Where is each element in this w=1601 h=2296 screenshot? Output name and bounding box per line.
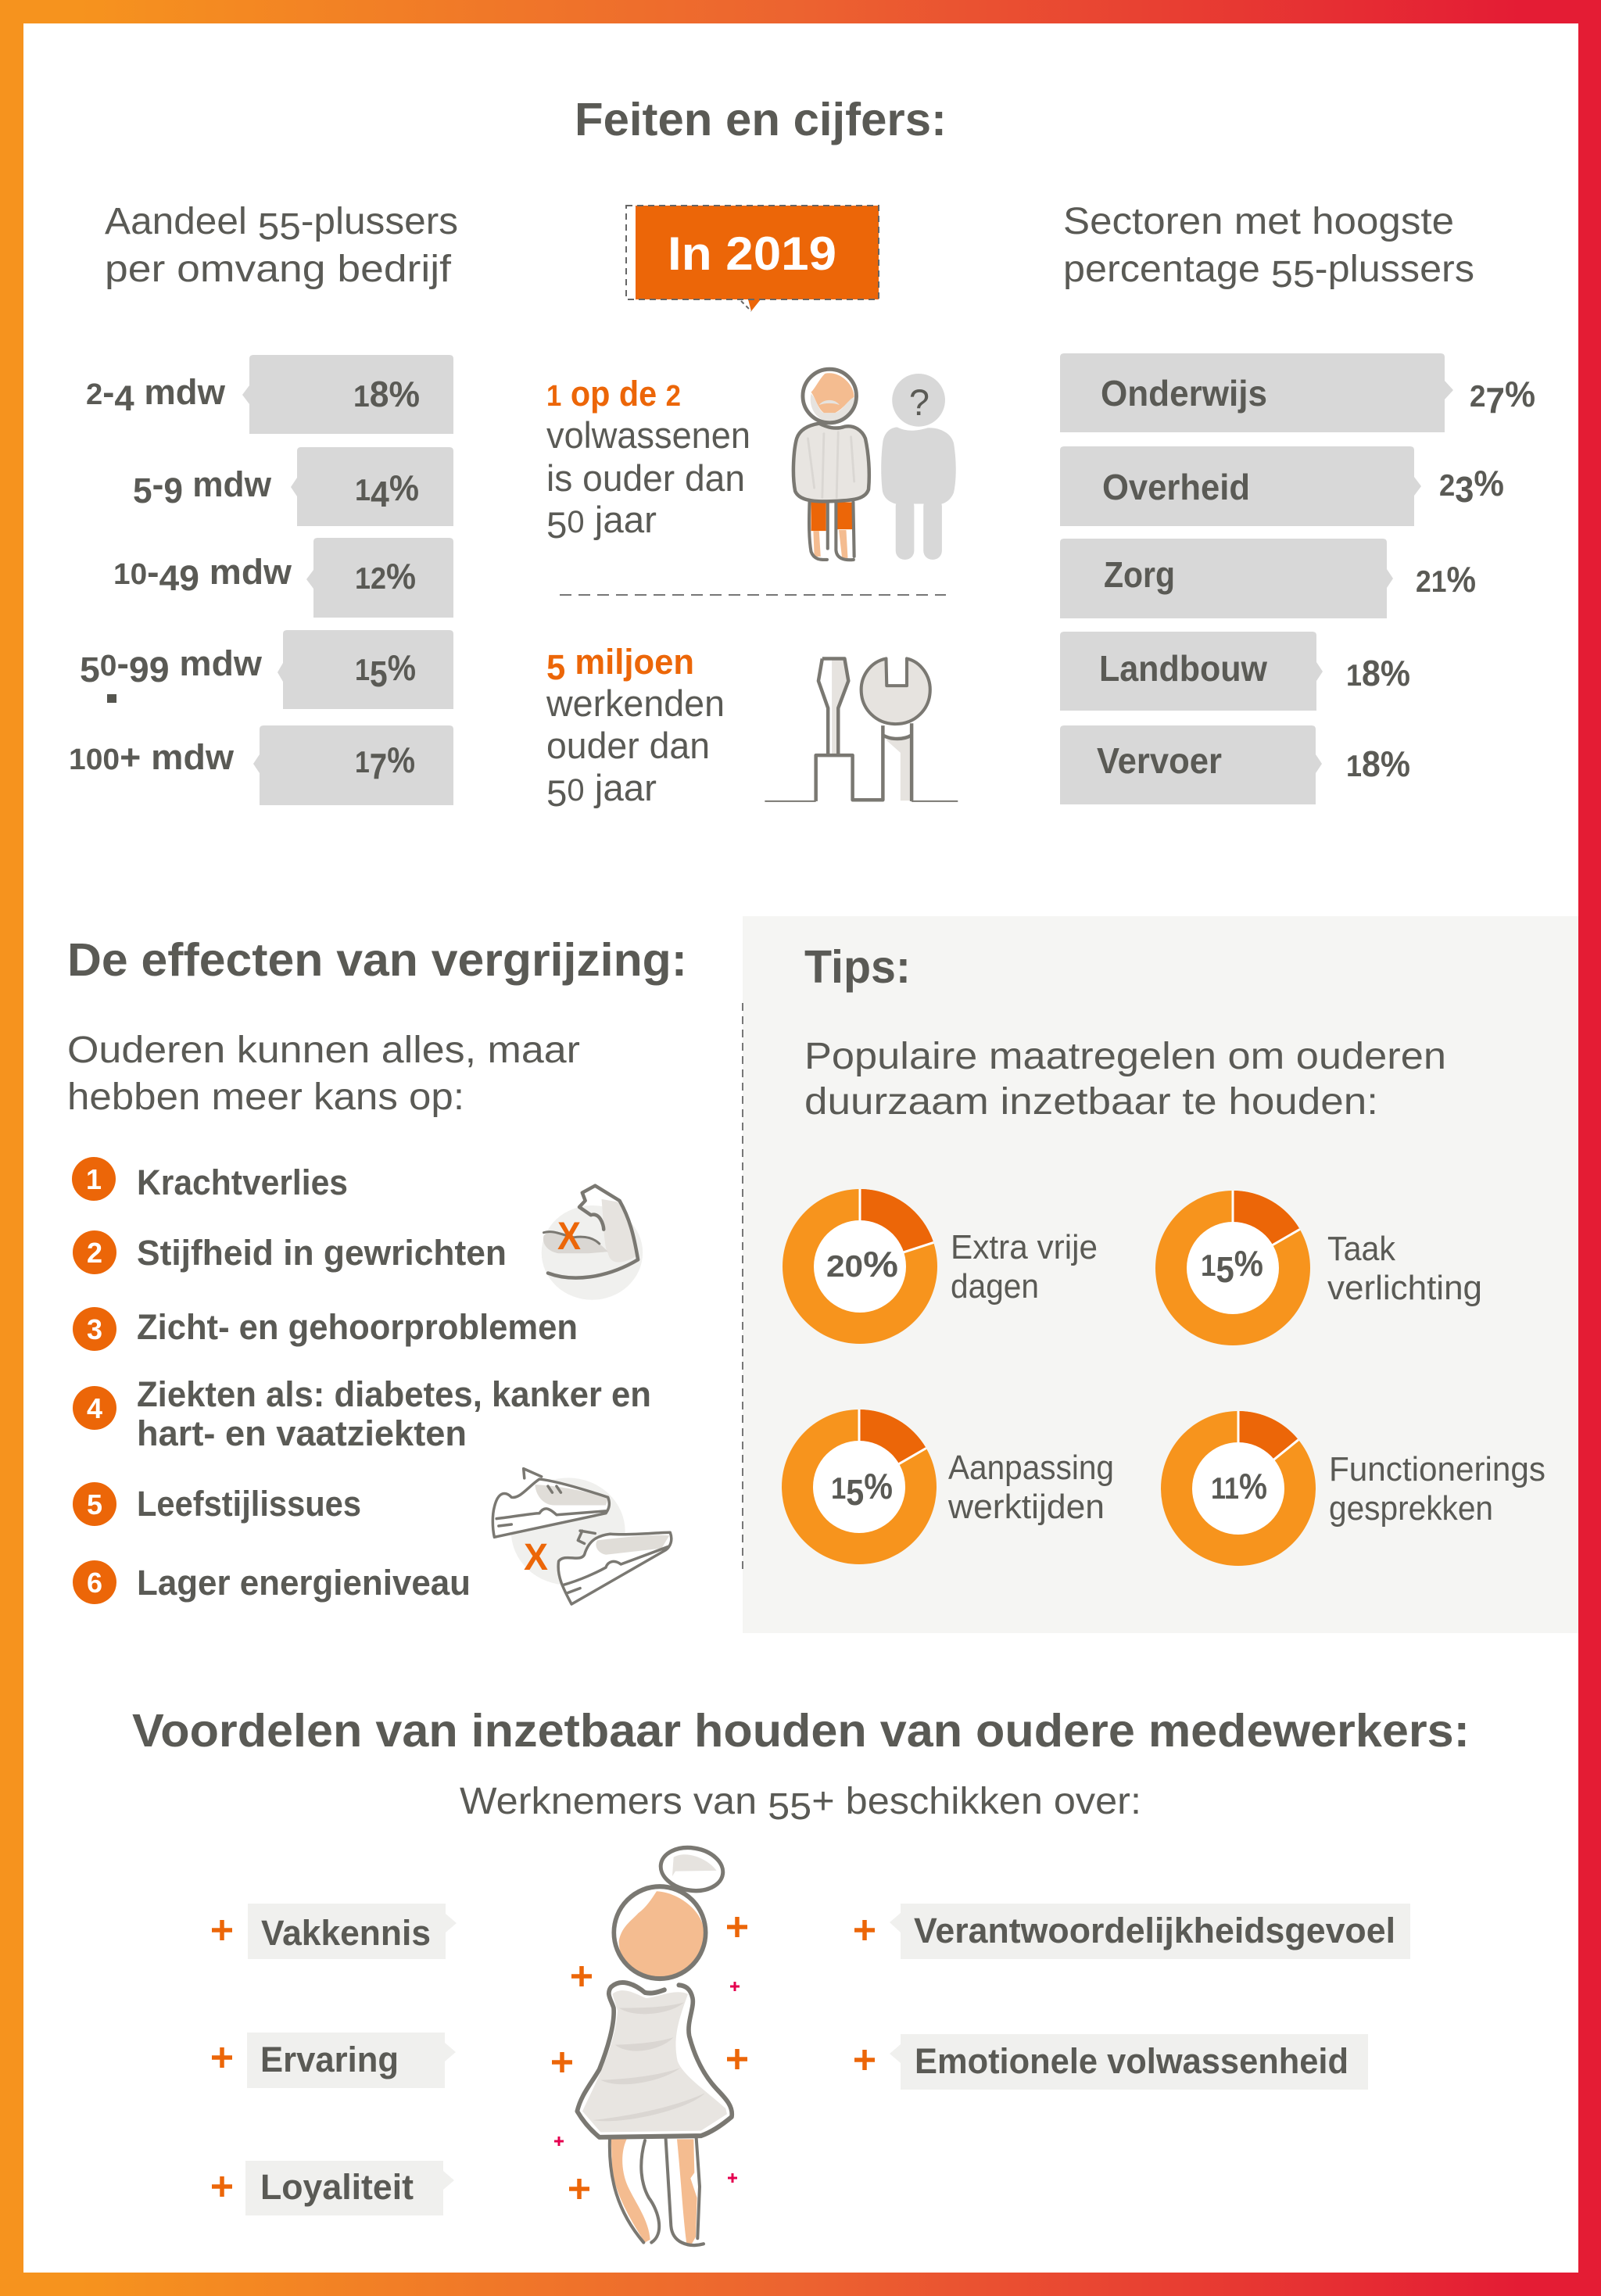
bar: 50-99 mdw 15%: 1	[355, 654, 370, 687]
text block: 1 op de 2: 1 op de 2	[546, 374, 681, 414]
icon: screwdriver and wrench	[765, 658, 958, 801]
callout: In 2019: In 2019	[668, 227, 836, 280]
list item 6: Lager energieniveau	[137, 1563, 471, 1603]
text block: 5 miljoen: 5	[546, 772, 567, 814]
donut: 15% Taak verlichting: 1	[1201, 1249, 1216, 1283]
bar: Zorg 21%	[1060, 539, 1476, 618]
icon: sneakers with X	[492, 1469, 672, 1604]
subheading: Sectoren met hoogste	[1063, 201, 1474, 296]
text block: 1 op de 2: 0	[567, 505, 585, 539]
panel: effects of ageing	[67, 934, 687, 1604]
bar: 50-99 mdw 15%: 5	[370, 654, 388, 694]
donut: 15% Aanpassing werktijden: 1	[831, 1472, 846, 1506]
bar: 2-4 mdw 18%	[86, 355, 453, 434]
bar: Vervoer 18%: Vervoer	[1097, 740, 1222, 781]
bar: 2-4 mdw 18%: 18%	[353, 374, 420, 414]
subheading: Aandeel 55-plussers	[105, 201, 458, 290]
icon: flexed arm with X	[542, 1186, 643, 1300]
benefit: Vakkennis: Vakkennis	[261, 1913, 431, 1953]
bar: Onderwijs 27%	[1060, 353, 1535, 432]
benefit: Vakkennis	[212, 1904, 457, 1959]
heading: Tips: Tips:	[804, 941, 911, 993]
bar: Vervoer 18%: 18%	[1346, 743, 1410, 784]
icon: older woman with plus signs	[552, 1843, 747, 2245]
list item 2: Stijfheid in gewrichten	[137, 1233, 507, 1273]
bar: 5-9 mdw 14%: 1	[355, 474, 371, 507]
subheading: Aandeel 55-plussers: 55	[258, 206, 301, 248]
list item 6: 6	[87, 1567, 102, 1599]
bar: 50-99 mdw 15%: mdw	[169, 643, 263, 683]
bar: 50-99 mdw 15%: 99	[129, 650, 169, 690]
panel: Tips	[743, 916, 1578, 1633]
panel: benefits of older employees	[132, 1705, 1470, 2245]
subheading: Sectoren met hoogste: 55	[1271, 254, 1315, 296]
bar: Landbouw 18%: Landbouw	[1099, 648, 1267, 689]
bar: 50-99 mdw 15%: %	[388, 647, 416, 688]
bar: Onderwijs 27%: 2	[1470, 380, 1486, 414]
subheading: Sectoren met hoogste: Sectoren met hoogste	[1063, 201, 1454, 242]
intro text	[804, 1036, 1446, 1123]
text block: 1 op de 2: jaar	[595, 499, 656, 540]
icon: older man and anonymous person	[793, 369, 956, 560]
benefit: Verantwoordelijkheidsgevoel: Verantwoordelijkheidsgevoel	[914, 1911, 1395, 1950]
bar: 5-9 mdw 14%	[133, 447, 453, 526]
intro text: hebben meer kans op:	[67, 1076, 464, 1118]
donut: 11% Functionerings gesprekken	[1161, 1411, 1545, 1566]
donut: 15% Aanpassing werktijden	[782, 1409, 1114, 1564]
bar: 5-9 mdw 14%: mdw	[183, 464, 272, 504]
donut: 15% Taak verlichting: %	[1234, 1243, 1263, 1284]
donut: 15% Aanpassing werktijden: Aanpassing	[948, 1449, 1114, 1487]
list item 3: Zicht- en gehoorproblemen	[137, 1307, 578, 1347]
donut: 15% Aanpassing werktijden: werktijden	[947, 1488, 1105, 1526]
donut: 15% Taak verlichting: 5	[1216, 1249, 1234, 1290]
bar: Onderwijs 27%: %	[1505, 374, 1535, 414]
list item 4: hart- en vaatziekten	[137, 1413, 467, 1453]
icon: flexed arm with X: X	[557, 1214, 581, 1258]
intro text	[67, 1030, 580, 1118]
panel: sectors with highest 55-plus share	[1060, 201, 1535, 804]
bar: Overheid 23%: Overheid	[1102, 467, 1250, 507]
bar: 5-9 mdw 14%: 4	[371, 474, 389, 514]
benefit: Ervaring: Ervaring	[260, 2040, 399, 2079]
bar: 10-49 mdw 12%: 10-	[113, 552, 159, 592]
text block: 1 op de 2: is ouder dan	[546, 457, 745, 499]
bar: 100+ mdw 17%: 7	[370, 746, 387, 786]
bar: Landbouw 18%	[1060, 632, 1410, 711]
bar: 10-49 mdw 12%	[113, 538, 453, 618]
benefit: Verantwoordelijkheidsgevoel	[854, 1904, 1410, 1959]
bar: 5-9 mdw 14%: 9	[163, 471, 183, 510]
text block: 1 op de 2: 5	[546, 504, 567, 546]
text block: 5 miljoen: ouder dan	[546, 725, 710, 766]
donut: 15% Taak verlichting: Taak	[1327, 1230, 1396, 1268]
bar: 100+ mdw 17%: 1	[355, 746, 370, 779]
text block: 1 op de 2	[546, 374, 750, 546]
bar: 2-4 mdw 18%: mdw	[134, 372, 226, 412]
subheading: Werknemers van 55+: + beschikken over:	[811, 1781, 1141, 1822]
bar: 100+ mdw 17%: %	[387, 740, 415, 780]
intro text: Populaire maatregelen om ouderen	[804, 1036, 1446, 1077]
benefit: Emotionele volwassenheid	[854, 2034, 1368, 2090]
subheading: Werknemers van 55+: Werknemers van	[460, 1781, 743, 1822]
list item 1: 1	[86, 1163, 102, 1195]
text block: 5 miljoen	[546, 642, 725, 814]
bar: 2-4 mdw 18%: 2-	[86, 372, 114, 412]
bar: 5-9 mdw 14%: 5	[133, 471, 152, 510]
benefit: Loyaliteit	[212, 2161, 454, 2215]
bar: 5-9 mdw 14%: -	[152, 464, 163, 504]
text block: 5 miljoen: werkenden	[546, 682, 725, 724]
heading: Voordelen: Voordelen van inzetbaar houden van oudere medewerkers:	[132, 1705, 1470, 1757]
heading: Feiten en cijfers: Feiten en cijfers:	[575, 94, 947, 145]
donut: 15% Taak verlichting	[1155, 1191, 1482, 1345]
text block: 5 miljoen: 0	[567, 773, 585, 808]
bar: Vervoer 18%	[1060, 725, 1410, 804]
subheading: Sectoren met hoogste: percentage	[1063, 249, 1251, 290]
text block: 5 miljoen: 5	[546, 647, 565, 687]
subheading: Werknemers van 55+: 55	[768, 1786, 811, 1828]
donut: 20% Extra vrije dagen: Extra vrije	[951, 1228, 1098, 1266]
subheading: Aandeel 55-plussers: per omvang bedrijf	[105, 249, 452, 290]
bar: 10-49 mdw 12%: 12%	[355, 556, 416, 596]
bar: 100+ mdw 17%: 100+ mdw	[69, 737, 235, 777]
panel: share of 55-plus by company size	[69, 201, 458, 805]
list item 5: Leefstijlissues	[137, 1484, 361, 1524]
subheading: Aandeel 55-plussers: -plussers	[301, 201, 458, 242]
intro text: Ouderen kunnen alles, maar	[67, 1030, 580, 1071]
list item 4	[73, 1374, 651, 1453]
list item 5: 5	[87, 1488, 102, 1521]
donut: 20% Extra vrije dagen	[783, 1189, 1098, 1344]
list item 1: Krachtverlies	[137, 1162, 348, 1202]
list item 3: 3	[87, 1313, 102, 1345]
bar: 10-49 mdw 12%: mdw	[199, 552, 292, 592]
donut: 20% Extra vrije dagen: 20%	[826, 1244, 898, 1284]
icon: older man and anonymous person: ?	[909, 382, 929, 423]
bar: Overheid 23%: 3	[1455, 469, 1474, 510]
list item 1	[72, 1157, 348, 1202]
bar: 5-9 mdw 14%: %	[389, 467, 419, 508]
bar: Onderwijs 27%: 7	[1486, 380, 1505, 421]
list item 2: 2	[87, 1237, 102, 1269]
benefit: Emotionele volwassenheid: Emotionele volwassenheid	[915, 2041, 1348, 2081]
bar: 50-99 mdw 15%: 5	[80, 650, 100, 690]
bar: Zorg 21%: Zorg	[1104, 554, 1175, 595]
bar: Overheid 23%: %	[1474, 463, 1504, 503]
subheading: Aandeel 55-plussers: Aandeel	[105, 201, 242, 242]
bar: Onderwijs 27%: Onderwijs	[1101, 373, 1267, 414]
bar: Overheid 23%: 2	[1439, 469, 1455, 503]
text block: 1 op de 2: volwassenen	[546, 414, 750, 456]
donut: 11% Functionerings gesprekken: 11%	[1211, 1466, 1267, 1506]
bar: Zorg 21%: 21%	[1416, 559, 1476, 600]
list item 5	[73, 1482, 361, 1526]
benefit: Loyaliteit: Loyaliteit	[260, 2167, 414, 2207]
intro text: duurzaam inzetbaar te houden:	[804, 1081, 1378, 1123]
donut: 11% Functionerings gesprekken: gesprekken	[1329, 1489, 1493, 1528]
bar: Landbouw 18%: 18%	[1346, 653, 1410, 693]
callout: In 2019	[626, 206, 879, 311]
bar: 100+ mdw 17%	[69, 725, 453, 805]
icon: sneakers with X: X	[524, 1537, 548, 1578]
benefit: Ervaring	[212, 2033, 456, 2088]
list item 4: Ziekten als: diabetes, kanker en	[137, 1374, 651, 1414]
bar: 50-99 mdw 15%: 0	[100, 650, 116, 682]
list item 4: 4	[87, 1392, 102, 1424]
donut: 15% Aanpassing werktijden: 5	[846, 1472, 864, 1513]
donut: 20% Extra vrije dagen: dagen	[951, 1267, 1039, 1306]
bar: Overheid 23%	[1060, 446, 1504, 526]
bar: 50-99 mdw 15%: -	[116, 643, 129, 683]
donut: 15% Aanpassing werktijden: %	[864, 1466, 893, 1506]
donut: 11% Functionerings gesprekken: Functionerings	[1329, 1450, 1545, 1488]
bar: 2-4 mdw 18%: 4	[114, 378, 134, 418]
text block: 5 miljoen: jaar	[595, 767, 656, 808]
subheading: Sectoren met hoogste: -plussers	[1315, 249, 1474, 290]
heading: De effecten van vergrijzing: De effecten van vergrijzing:	[67, 934, 687, 986]
bar: 10-49 mdw 12%: 49	[159, 558, 199, 598]
text block: 5 miljoen: miljoen	[565, 642, 694, 682]
bar: 50-99 mdw 15%	[80, 630, 453, 709]
donut: 15% Taak verlichting: verlichting	[1327, 1269, 1482, 1307]
